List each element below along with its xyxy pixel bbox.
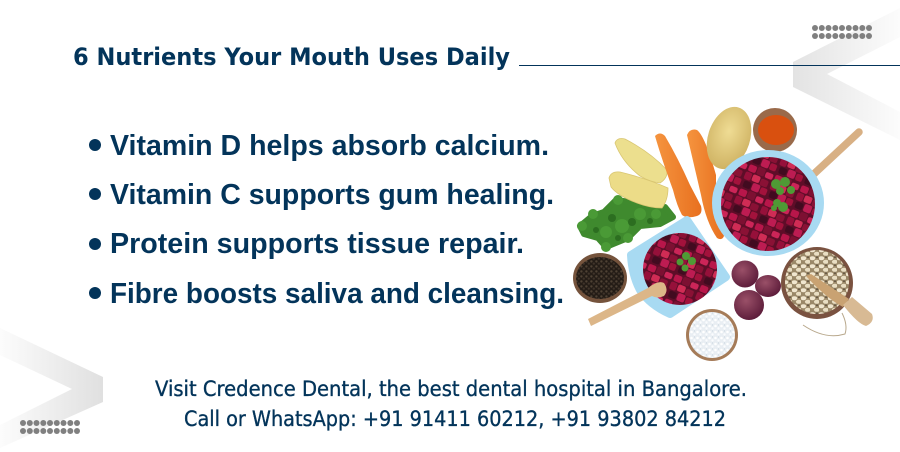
dot grid: bottom left	[20, 420, 80, 434]
bullet list	[89, 130, 564, 310]
title: 6 Nutrients Your Mouth Uses Daily	[73, 43, 510, 71]
icon: parsley	[577, 195, 673, 252]
bullet: vitamin D: Vitamin D helps absorb calcium.	[110, 130, 549, 162]
bullet: protein: Protein supports tissue repair.	[110, 228, 524, 260]
bullet: fibre: Fibre boosts saliva and cleansing.	[110, 278, 564, 310]
footer contact text	[155, 377, 747, 431]
icon: potato wedge lower	[609, 172, 668, 208]
icon: red onions	[732, 260, 781, 320]
icon: beans bowl	[781, 247, 853, 319]
footer line: phone: Call or WhatsApp: +91 91411 60212, +91 93802 84212	[184, 407, 726, 431]
background chevron: top right	[793, 8, 900, 140]
icon: carrot left	[655, 134, 702, 217]
bullet: vitamin C: Vitamin C supports gum healing.	[110, 179, 554, 211]
dot grid: top right	[812, 25, 872, 39]
food illustration	[573, 101, 873, 361]
icon: large blue bowl with beet salad	[712, 150, 824, 256]
footer line: visit: Visit Credence Dental, the best dental hospital in Bangalore.	[155, 377, 747, 401]
icon: carrot right	[687, 130, 724, 239]
background chevron: bottom left	[0, 328, 103, 448]
icon: wooden spoon large	[802, 132, 859, 185]
icon: peppercorn bowl	[573, 253, 627, 303]
icon: cilantro garnish	[771, 177, 795, 212]
icon: cilantro garnish small	[676, 252, 696, 272]
icon: wooden spoon small	[588, 282, 666, 326]
icon: chili powder bowl	[753, 108, 797, 152]
icon: whole potato	[699, 101, 759, 175]
icon: salt bowl	[686, 309, 738, 361]
icon: small blue bowl with beet salad	[631, 220, 726, 314]
icon: potato wedge top	[615, 138, 667, 183]
icon: wooden scoop	[803, 274, 873, 336]
